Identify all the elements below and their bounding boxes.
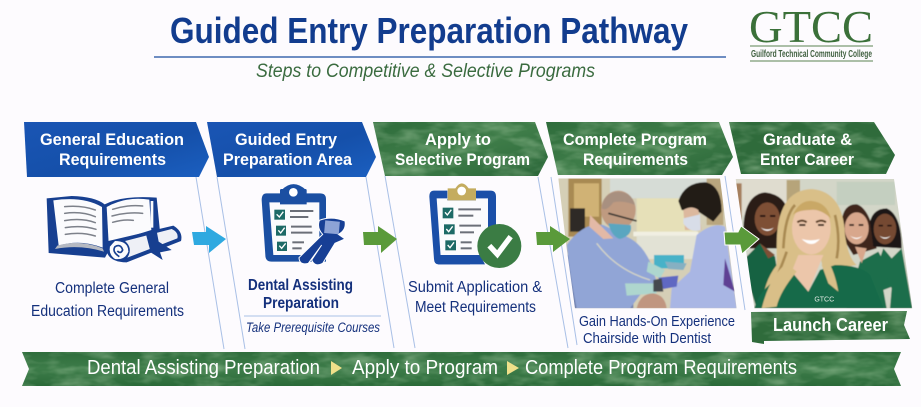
text: Complete General Education Requirements: Education Requirements <box>31 303 184 320</box>
woman <box>678 182 722 222</box>
logo: GTCC: GTCC <box>749 1 873 52</box>
header: Guided Entry Preparation Area: Guided Entry <box>235 130 338 149</box>
header: Graduate & Enter Career: Enter Career <box>760 150 854 169</box>
arrow: blue <box>192 226 226 253</box>
header: Apply to Selective Program <box>373 122 548 176</box>
header: Complete Program Requirements <box>546 122 733 175</box>
banner: bottom pathway: Complete Program Requirements <box>525 357 797 379</box>
column separators <box>196 176 745 349</box>
woman left <box>743 192 788 248</box>
photo: dental chairside <box>557 177 738 310</box>
text: Submit Application & Meet Requirements: Submit Application & <box>408 279 543 296</box>
icon: clipboard with check <box>429 183 521 268</box>
header: Guided Entry Preparation Area <box>207 122 376 177</box>
header: Guided Entry Preparation Area: Preparation Area <box>223 150 353 169</box>
title: Guided Entry Preparation Pathway <box>170 10 688 51</box>
header: General Education Requirements <box>24 122 209 177</box>
woman right 2 <box>870 208 902 248</box>
photo: graduates in green scrubs <box>733 178 915 309</box>
text: Submit Application & Meet Requirements: Meet Requirements <box>415 299 536 316</box>
main woman <box>764 188 856 290</box>
header: Graduate & Enter Career <box>729 122 895 174</box>
arrow: green 2 <box>536 226 570 252</box>
text: Gain Hands-On Experience Chairside with Dentist: Chairside with Dentist <box>583 330 712 347</box>
banner: bottom pathway: Dental Assisting Preparation <box>87 357 320 379</box>
header: General Education Requirements: Requirements <box>59 150 166 169</box>
patient <box>637 293 667 308</box>
icon: clipboard and dental tools <box>262 184 345 265</box>
header: Complete Program Requirements: Requirements <box>583 150 688 169</box>
banner: bottom pathway: Apply to Program <box>352 357 498 379</box>
text: Dental Assisting Preparation: Preparation <box>263 295 339 312</box>
header: Apply to Selective Program: Apply to <box>425 130 491 149</box>
header: General Education Requirements: General Education <box>40 130 184 149</box>
header: Complete Program Requirements: Complete Program <box>563 130 707 149</box>
icon: open book and diploma <box>47 196 181 262</box>
man <box>567 225 657 308</box>
text: Complete General Education Requirements <box>31 280 184 320</box>
text: Complete General Education Requirements: Complete General <box>55 280 169 297</box>
text: Dental Assisting Preparation: Dental Assisting <box>248 277 353 294</box>
text: Dental Assisting Preparation <box>248 277 353 312</box>
subtitle: Steps to Competitive & Selective Programs <box>256 61 595 82</box>
header: Graduate & Enter Career: Graduate & <box>763 130 852 149</box>
photo: graduates in green scrubs: GTCC <box>814 297 834 304</box>
text: Gain Hands-On Experience Chairside with Dentist: Gain Hands-On Experience <box>579 313 735 330</box>
banner: Launch Career <box>751 311 910 344</box>
text: Submit Application & Meet Requirements <box>408 279 543 316</box>
header: Apply to Selective Program: Selective Program <box>395 150 530 169</box>
arrow: green 3 <box>724 226 759 254</box>
text: Take Prerequisite Courses: Take Prerequisite Courses <box>246 320 380 335</box>
banner: Launch Career: Launch Career <box>773 315 888 335</box>
banner: bottom pathway <box>22 352 901 386</box>
woman right 1 <box>842 204 877 255</box>
arrow: green 1 <box>363 226 397 253</box>
text: Gain Hands-On Experience Chairside with Dentist <box>579 313 735 347</box>
